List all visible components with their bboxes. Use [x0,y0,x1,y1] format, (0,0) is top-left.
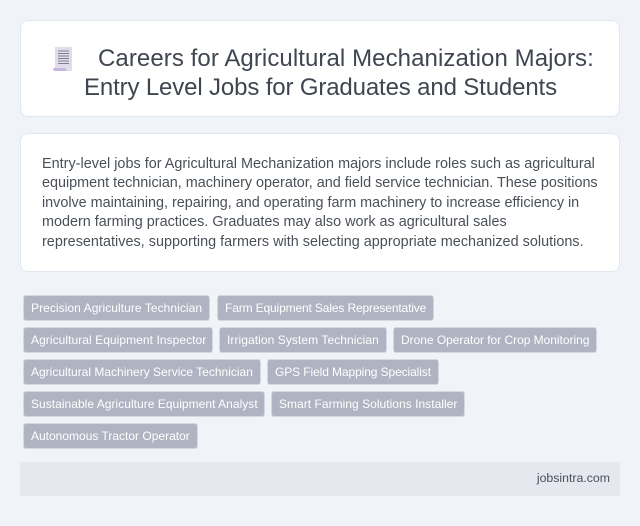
tag [23,295,210,321]
description panel: equipment technician, machinery operator, and field service technician. These positions [42,175,598,191]
tag: GPS Field Mapping Specialist [275,365,431,379]
tag: Agricultural Machinery Service Technician [31,365,253,379]
tag: Sustainable Agriculture Equipment Analyst [31,397,258,411]
tag [23,423,198,449]
tag: Agricultural Equipment Inspector [31,333,206,347]
footer bar [20,462,620,496]
description panel: representatives, supporting farmers with selecting appropriate mechanized solutions. [42,234,584,250]
footer text: jobsintra.com [537,471,610,485]
tag [217,295,434,321]
icon: document scroll [53,47,72,71]
tag [23,391,265,417]
tag [23,359,261,385]
header panel [20,20,620,117]
description panel: Entry-level jobs for Agricultural Mechanization majors include roles such as agricultural [42,156,595,172]
header panel: Careers for Agricultural Mechanization Majors: [98,45,594,72]
tag: Drone Operator for Crop Monitoring [401,333,589,347]
tag: Autonomous Tractor Operator [31,429,190,443]
tag [23,327,213,353]
tag [219,327,387,353]
header panel: Entry Level Jobs for Graduates and Students [84,74,557,101]
description panel: involve maintaining, repairing, and operating farm machinery to increase efficiency in [42,195,579,211]
tag [271,391,465,417]
tag [267,359,439,385]
description panel [20,133,620,272]
tag: Irrigation System Technician [227,333,379,347]
tag: Precision Agriculture Technician [31,301,202,315]
tag: Farm Equipment Sales Representative [225,301,426,315]
description panel: modern farming practices. Graduates may also work as agricultural sales [42,214,507,230]
tag [393,327,597,353]
description text [42,156,598,250]
tag: Smart Farming Solutions Installer [279,397,457,411]
title [84,45,594,101]
